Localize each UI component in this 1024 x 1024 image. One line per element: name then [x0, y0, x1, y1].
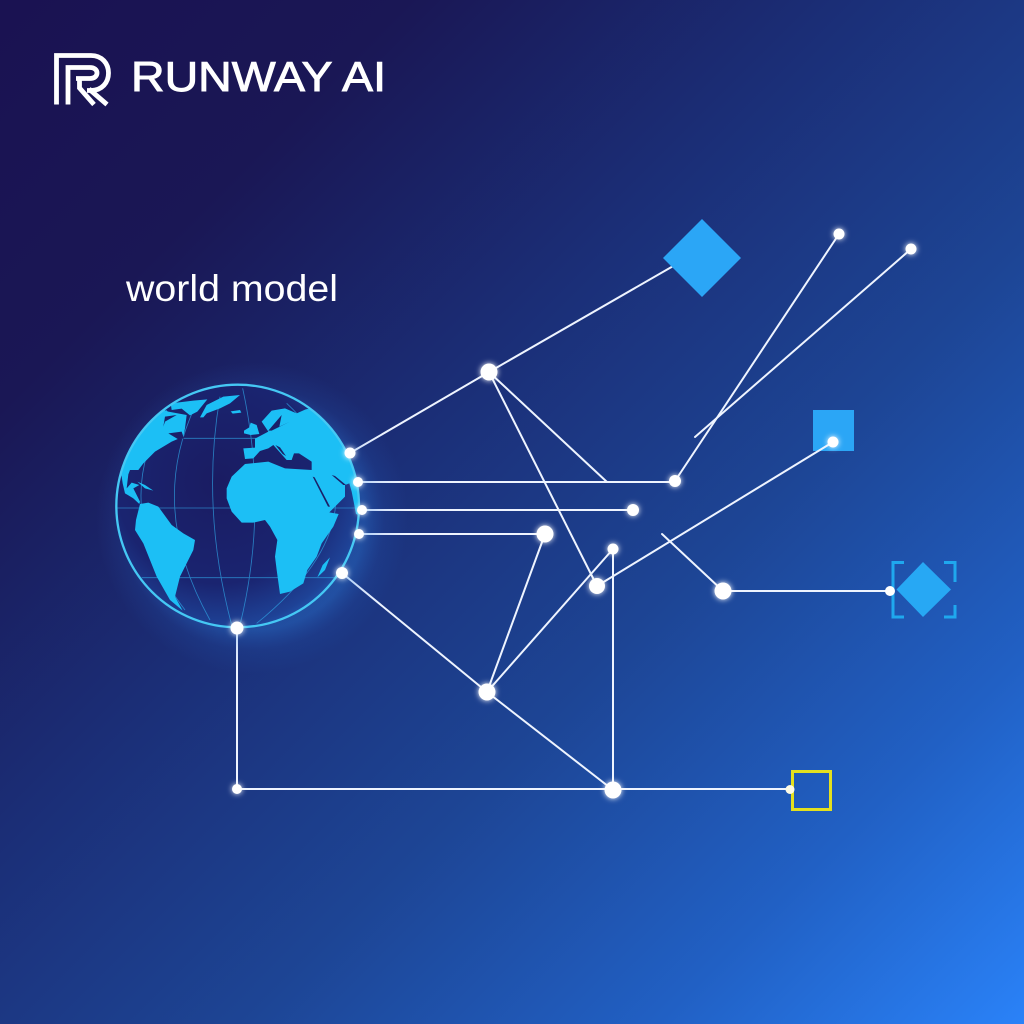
- network connector lines: [237, 234, 911, 790]
- Arctic islands: [171, 399, 207, 415]
- icon: R monogram: [56, 56, 108, 104]
- continents: [113, 395, 373, 611]
- globe rim: [116, 385, 359, 627]
- globe sphere: [117, 385, 359, 627]
- Madagascar: [317, 557, 330, 577]
- inland seas: [163, 415, 346, 507]
- icon: large blue diamond: [663, 219, 741, 297]
- brand name: RUNWAY AI: [131, 53, 386, 100]
- logo: Runway AI: [56, 53, 386, 104]
- globe: [112, 377, 398, 664]
- North America: [122, 410, 187, 504]
- icon: bracketed diamond: [885, 562, 955, 617]
- Greenland: [200, 395, 240, 417]
- South America: [135, 503, 195, 611]
- icon: blue square: [813, 410, 854, 451]
- Iceland: [231, 410, 241, 414]
- British Isles: [244, 423, 259, 435]
- Eurasia and Africa: [226, 408, 358, 594]
- globe glow: [96, 362, 408, 674]
- icon: yellow square: [786, 772, 830, 810]
- heading: world model: world model: [125, 268, 338, 309]
- globe graticule: [117, 388, 360, 625]
- node markers: [230, 228, 916, 798]
- Caribbean islands: [137, 482, 153, 491]
